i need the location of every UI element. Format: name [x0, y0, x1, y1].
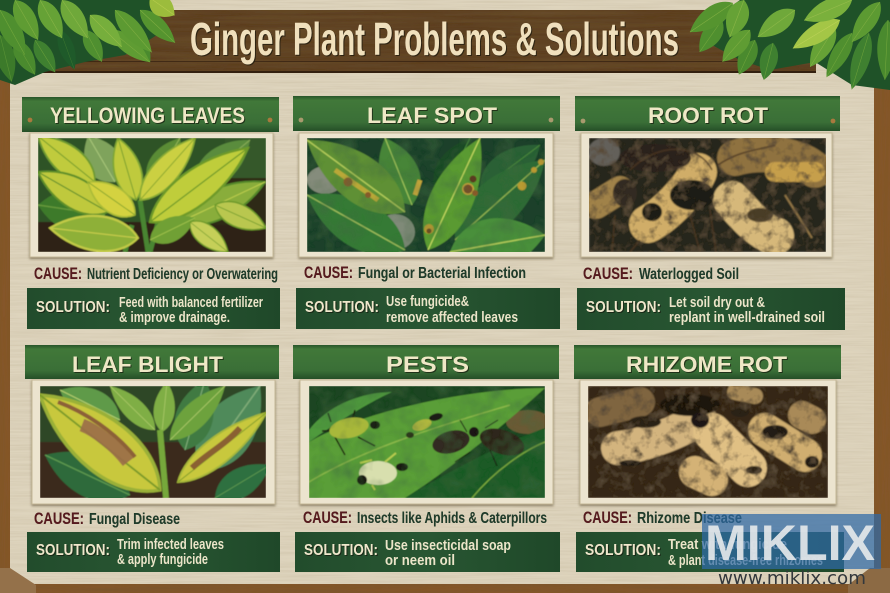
- solution bar: SOLUTION:: [585, 542, 661, 559]
- solution bar: [295, 532, 560, 572]
- cause text: [583, 509, 742, 527]
- cause text: Rhizome Disease: [637, 510, 742, 527]
- heading plaque: leaf spot: [293, 96, 560, 131]
- heading plaque: leaf spot: LEAF SPOT: [367, 103, 497, 128]
- solution bar: [577, 288, 845, 330]
- cause text: [34, 510, 180, 528]
- cause text: CAUSE:: [34, 265, 82, 283]
- cause text: Nutrient Deficiency or Overwatering: [87, 266, 278, 283]
- cause text: CAUSE:: [583, 509, 632, 527]
- solution bar: Feed with balanced fertilizer: [119, 294, 263, 311]
- solution bar: [576, 532, 844, 572]
- panel: leaf blight: [23, 345, 281, 572]
- photo: spotted leaves: [296, 132, 556, 261]
- cause text: CAUSE:: [583, 265, 633, 283]
- cause text: [303, 509, 547, 527]
- title plank: [26, 10, 816, 73]
- panel: rhizome rot: [574, 345, 844, 572]
- panel: root rot: [575, 96, 845, 330]
- solution bar: & plant disease-free rhizomes: [668, 552, 823, 569]
- photo: rotting roots: [581, 133, 832, 257]
- solution bar: & apply fungicide: [117, 551, 208, 568]
- cause text: CAUSE:: [303, 509, 352, 527]
- solution bar: [296, 288, 560, 329]
- watermark logo: MIKLIX: [705, 515, 875, 571]
- heading plaque: rhizome rot: RHIZOME ROT: [626, 352, 787, 377]
- solution bar: remove affected leaves: [386, 309, 518, 326]
- heading plaque: yellowing leaves: [22, 97, 279, 132]
- cause text: Fungal Disease: [89, 511, 180, 528]
- solution bar: SOLUTION:: [36, 542, 110, 559]
- heading plaque: root rot: ROOT ROT: [648, 103, 768, 128]
- photo: leaf blight: [30, 379, 278, 508]
- solution bar: SOLUTION:: [304, 542, 378, 559]
- heading plaque: rhizome rot: [574, 345, 841, 379]
- solution bar: SOLUTION:: [586, 299, 661, 316]
- heading plaque: pests: PESTS: [386, 352, 469, 377]
- icon: leaves top left: [0, 0, 181, 85]
- watermark url: www.miklix.com: [718, 569, 866, 589]
- solution bar: Treat with fungicide: [668, 536, 787, 553]
- heading plaque: yellowing leaves: YELLOWING LEAVES: [50, 103, 245, 128]
- panel: leaf spot: [293, 96, 561, 329]
- cause text: CAUSE:: [304, 264, 353, 282]
- cause text: Waterlogged Soil: [639, 266, 739, 283]
- cause text: Fungal or Bacterial Infection: [358, 265, 526, 282]
- solution bar: Use fungicide&: [386, 293, 469, 310]
- solution bar: or neem oil: [385, 552, 455, 569]
- solution bar: Use insecticidal soap: [385, 537, 511, 554]
- cause text: Insects like Aphids & Caterpillors: [357, 510, 547, 527]
- solution bar: [27, 288, 280, 329]
- solution bar: [27, 532, 280, 572]
- icon: leaves top right: [684, 0, 890, 92]
- solution bar: Trim infected leaves: [117, 536, 224, 553]
- panel: pests: [293, 345, 560, 572]
- cause text: [583, 265, 739, 283]
- panel: yellowing leaves: [22, 97, 280, 329]
- cause text: [304, 264, 526, 282]
- cause text: [34, 265, 278, 283]
- heading plaque: leaf blight: [25, 345, 279, 379]
- cause text: CAUSE:: [34, 510, 84, 528]
- solution bar: SOLUTION:: [36, 299, 110, 316]
- photo: yellowing ginger leaves: [29, 125, 273, 260]
- heading plaque: leaf blight: LEAF BLIGHT: [72, 352, 223, 377]
- solution bar: SOLUTION:: [305, 299, 379, 316]
- solution bar: & improve drainage.: [119, 309, 230, 326]
- heading plaque: pests: [293, 345, 559, 379]
- photo: rotting rhizomes: [580, 380, 836, 504]
- solution bar: Let soil dry out &: [669, 294, 765, 311]
- solution bar: replant in well-drained soil: [669, 309, 825, 326]
- photo: insects on leaf: [300, 380, 553, 504]
- heading plaque: root rot: [575, 96, 840, 131]
